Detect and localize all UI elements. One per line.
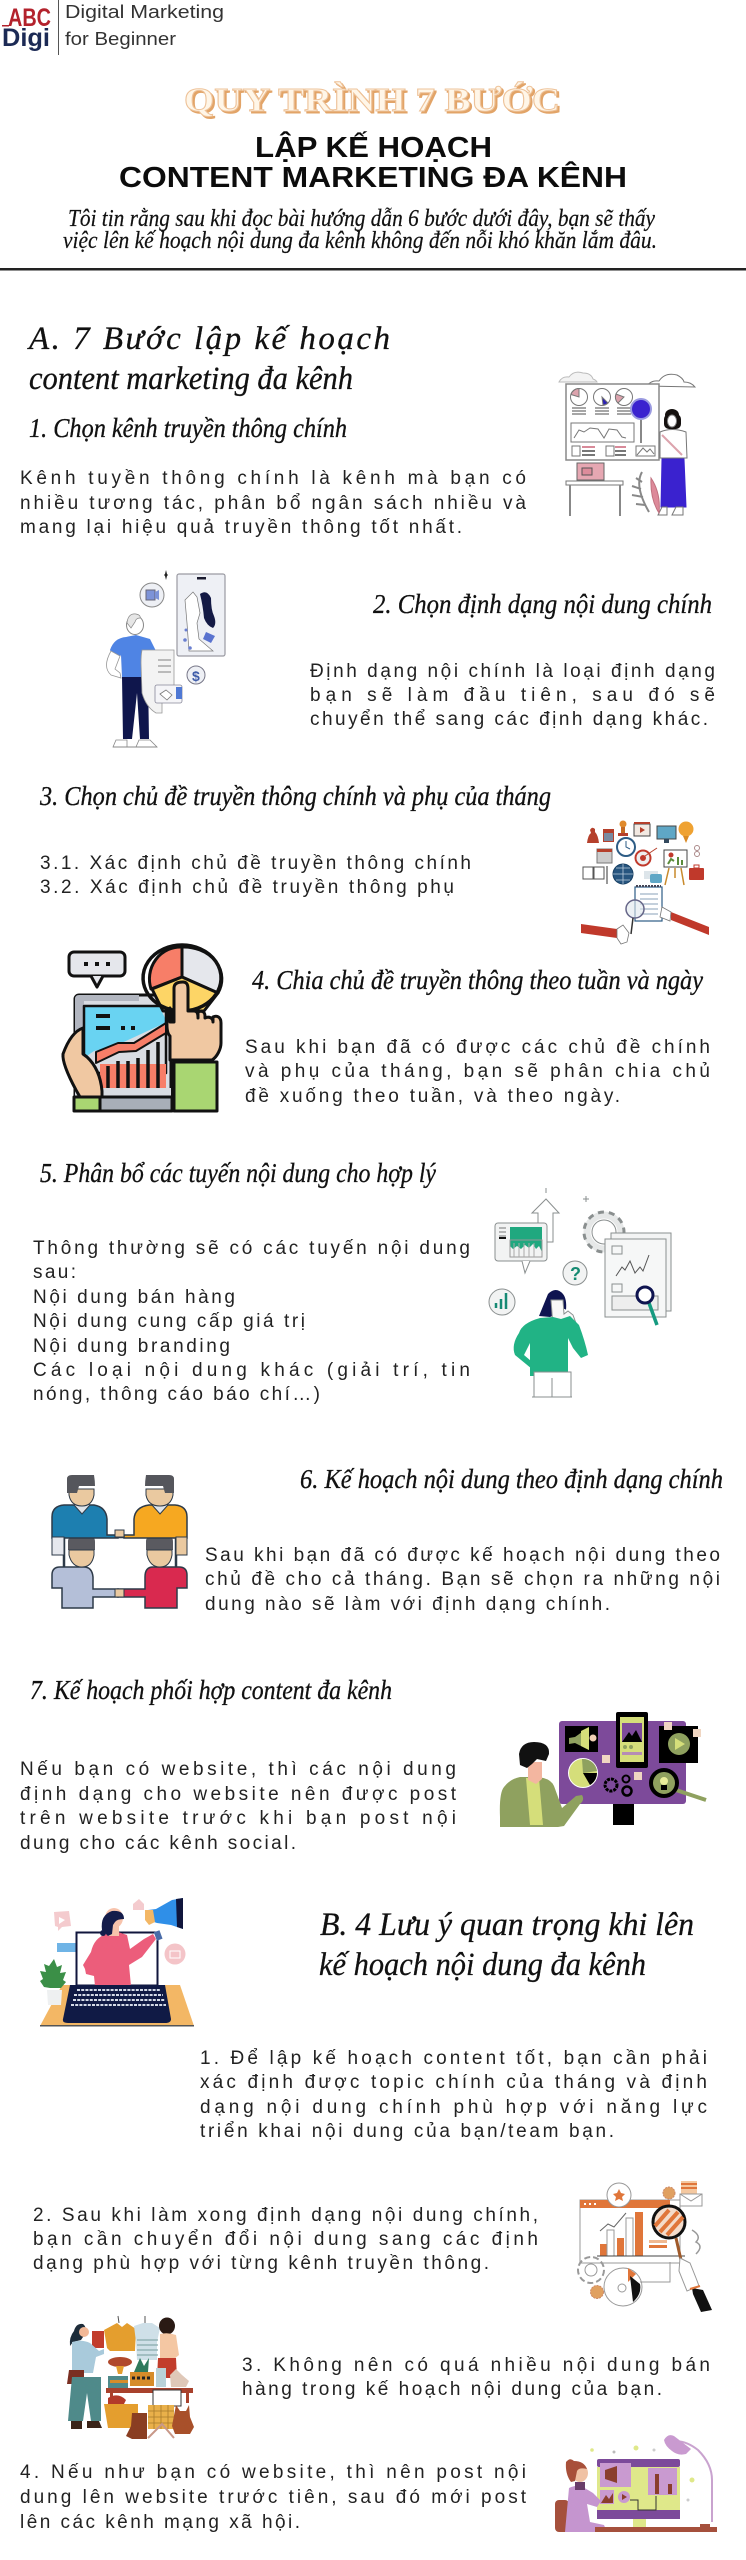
step 7 heading: 7. Kế hoạch phối hợp content đa kênh (30, 1675, 392, 1705)
illustration: man with phone and invoices (106, 570, 225, 747)
step 5 text: nóng, thông cáo báo chí…) (33, 1384, 320, 1405)
intro text: Tôi tin rằng sau khi đọc bài hướng dẫn 6 bước dưới đây, bạn sẽ thấy (68, 206, 655, 232)
section heading A: A. 7 Bước lập kế hoạch (27, 321, 390, 357)
note 2 text: 2. Sau khi làm xong định dạng nội dung chính, (33, 2205, 538, 2226)
step 4 text: và phụ của tháng, bạn sẽ phân chia chủ (245, 1061, 710, 1082)
step 7 text: Nếu bạn có website, thì các nội dung (20, 1759, 456, 1780)
logo: ABC Digi: Digital Marketing (65, 2, 224, 22)
step 5 text: Nội dung branding (33, 1336, 230, 1357)
note 3 text (242, 2355, 710, 2400)
intro text (63, 206, 657, 254)
step 3 text (40, 853, 471, 898)
note 1 text (200, 2048, 707, 2142)
step 5 text: Nội dung bán hàng (33, 1287, 235, 1308)
illustration: team meeting (52, 1475, 187, 1608)
step 7 text: định dạng cho website nên được post (20, 1784, 457, 1805)
step 5 text: Nội dung cung cấp giá trị (33, 1311, 305, 1332)
step 6 text: chủ đề cho cả tháng. Bạn sẽ chọn ra những nội (205, 1569, 720, 1590)
section heading A (27, 321, 390, 397)
illustration: shopping stall and customers (67, 2316, 194, 2439)
step 4 heading: 4. Chia chủ đề truyền thông theo tuần và ngày (252, 965, 703, 995)
note 3 text: 3. Không nên có quá nhiều nội dung bán (242, 2355, 710, 2376)
logo: ABC Digi: for Beginner (65, 29, 176, 49)
step 5 text: sau: (33, 1262, 76, 1283)
note 1 text: xác định được topic chính của tháng và định (200, 2072, 707, 2093)
step 2 heading: 2. Chọn định dạng nội dung chính (373, 589, 712, 619)
illustration: woman thinking with charts (489, 1188, 671, 1397)
illustration: chart analysis with magnifier (578, 2181, 712, 2312)
step 5 text: Các loại nội dung khác (giải trí, tin (33, 1360, 470, 1381)
step 7 text: dung cho các kênh social. (20, 1833, 296, 1854)
step 6 text: dung nào sẽ làm với định dạng chính. (205, 1594, 610, 1615)
illustration: woman analysing dashboard (559, 372, 695, 516)
logo: ABC Digi: Digi (2, 24, 50, 52)
illustration: woman thinking with charts: ? (570, 1264, 581, 1284)
heading: Lập kế hoạch content marketing đa kênh: CONTENT MARKETING ĐA KÊNH (119, 160, 627, 194)
step 6 text: Sau khi bạn đã có được kế hoạch nội dung theo (205, 1545, 720, 1566)
note 2 text: bạn cần chuyển đổi nội dung sang các định (33, 2229, 538, 2250)
note 2 text: dạng phù hợp với từng kênh truyền thông. (33, 2253, 489, 2274)
step 2 text (310, 661, 715, 730)
note 4 text: dung lên website trước tiên, sau đó mới post (20, 2487, 527, 2508)
illustration: person at monitor with desk lamp (555, 2435, 717, 2532)
note 1 text: 1. Để lập kế hoạch content tốt, bạn cần phải (200, 2048, 707, 2069)
step 6 text (205, 1545, 720, 1615)
step 1 text (20, 468, 526, 538)
note 4 text: 4. Nếu như bạn có website, thì nên post nội (20, 2462, 526, 2483)
logo: ABC Digi (2, 0, 224, 55)
note 2 text (33, 2205, 538, 2274)
heading: Lập kế hoạch content marketing đa kênh (119, 130, 627, 194)
note 1 text: dạng nội dung chính phù hợp với năng lực (200, 2097, 707, 2118)
illustration: presenter with purple media board (500, 1712, 706, 1827)
note 1 text: triển khai nội dung của bạn/team bạn. (200, 2121, 614, 2142)
step 5 text: Thông thường sẽ có các tuyến nội dung (33, 1238, 470, 1259)
illustration: hands, tablet and pie chart (63, 945, 222, 1111)
step 5 heading: 5. Phân bổ các tuyến nội dung cho hợp lý (40, 1158, 436, 1188)
step 3 heading: 3. Chọn chủ đề truyền thông chính và phụ của tháng (39, 781, 551, 811)
step 3 text: 3.2. Xác định chủ đề truyền thông phụ (40, 877, 454, 898)
step 1 heading: 1. Chọn kênh truyền thông chính (29, 413, 347, 443)
section heading B: B. 4 Lưu ý quan trọng khi lên (320, 1907, 694, 1943)
note 4 text: lên các kênh mạng xã hội. (20, 2512, 300, 2533)
step 1 text: nhiều tương tác, phân bổ ngân sách nhiều và (20, 493, 526, 514)
step 4 text: đề xuống theo tuần, và theo ngày. (245, 1086, 620, 1107)
note 3 text: hàng trong kế hoạch nội dung của bạn. (242, 2379, 662, 2400)
step 2 text: Định dạng nội chính là loại định dạng (310, 661, 715, 682)
logo: ABC Digi: ABC (8, 4, 51, 32)
illustration: marketing icons and notepad (581, 820, 709, 944)
section heading B: kế hoạch nội dung đa kênh (319, 1947, 646, 1983)
step 2 text: bạn sẽ làm đầu tiên, sau đó sẽ (310, 685, 715, 706)
step 4 text: Sau khi bạn đã có được các chủ đề chính (245, 1037, 710, 1058)
step 7 text (20, 1759, 457, 1854)
illustration: man with phone and invoices: $ (192, 668, 200, 684)
section heading B (319, 1907, 694, 1983)
heading: Lập kế hoạch content marketing đa kênh: LẬP KẾ HOẠCH (255, 130, 492, 164)
step 5 text (33, 1238, 470, 1405)
step 3 text: 3.1. Xác định chủ đề truyền thông chính (40, 853, 471, 874)
note 4 text (20, 2462, 527, 2533)
step 1 text: mang lại hiệu quả truyền thông tốt nhất. (20, 517, 462, 538)
title: Quy trình 7 bước: QUY TRÌNH 7 BƯỚC (184, 81, 560, 119)
step 7 text: trên website trước khi bạn post nội (20, 1808, 456, 1829)
illustration: woman with megaphone on laptop (40, 1898, 194, 2026)
section heading A: content marketing đa kênh (29, 361, 353, 397)
intro text: việc lên kế hoạch nội dung đa kênh không đến nỗi khó khăn lắm đâu. (63, 228, 657, 254)
step 4 text (245, 1037, 710, 1107)
step 1 text: Kênh tuyền thông chính là kênh mà bạn có (20, 468, 526, 489)
step 2 text: chuyển thể sang các định dạng khác. (310, 709, 708, 730)
